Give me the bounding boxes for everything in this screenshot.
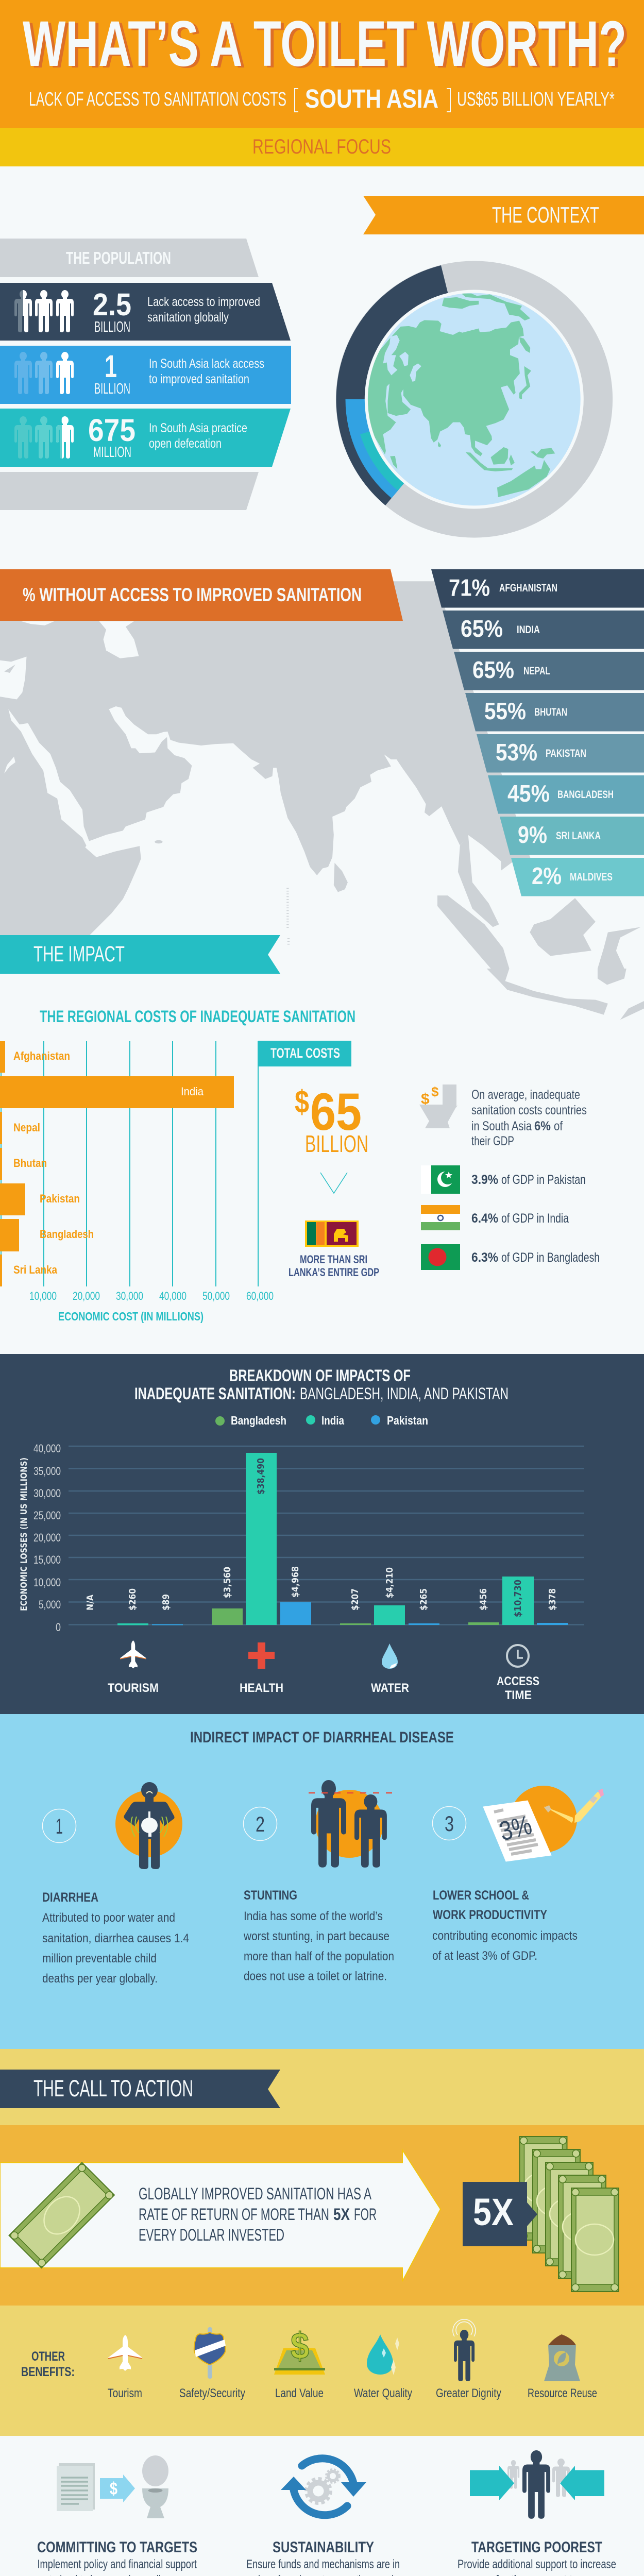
India GDP [471, 1211, 569, 1226]
icon: clock [507, 1645, 529, 1667]
row: Bangladesh: 45% [507, 780, 550, 807]
stat: 1 billion: to improved sanitation [149, 372, 249, 386]
icon: document, money and toilet: $ [110, 2479, 117, 2499]
other benefits heading: BENEFITS: [21, 2365, 75, 2379]
bar value labels: $4,968 [290, 1566, 301, 1598]
donut segment: south asia [345, 399, 474, 498]
icon: safety shield [194, 2327, 226, 2379]
donut ring [336, 261, 613, 538]
breakdown heading: INADEQUATE SANITATION: [134, 1384, 296, 1403]
panel: breakdown of impacts [0, 1354, 644, 1714]
breakdown heading: BANGLADESH, INDIA, AND PAKISTAN [300, 1384, 509, 1403]
GDP text: in South Asia [471, 1119, 532, 1133]
bar value labels: $38,490 [256, 1458, 266, 1495]
category labels: HEALTH [240, 1681, 283, 1695]
icon: toilet with dollars [419, 1084, 457, 1128]
bar chart: regional costs [0, 1041, 274, 1323]
legend: India [321, 1414, 344, 1427]
legend [215, 1414, 428, 1427]
icon: document, money and toilet [57, 2455, 168, 2518]
icon: water drop [382, 1643, 398, 1669]
icon: toilet with dollars: $ [431, 1084, 439, 1099]
heading: regional costs: THE REGIONAL COSTS OF INADEQUATE SANITATION [40, 1007, 355, 1026]
header panel [0, 0, 644, 128]
panel: indirect impact [0, 1714, 644, 2049]
bar value labels: $456 [478, 1588, 489, 1611]
row: Sri Lanka [500, 817, 644, 855]
y axis labels [33, 1442, 61, 1634]
regional focus strip: REGIONAL FOCUS [252, 135, 391, 158]
targeting text [457, 2539, 616, 2576]
bar value labels: $207 [350, 1588, 361, 1611]
benefit labels: Safety/Security [179, 2386, 245, 2400]
bar value labels [85, 1458, 558, 1617]
subtitle: SOUTH ASIA [305, 84, 438, 113]
banner: the call to action [0, 2070, 280, 2108]
Bangladesh GDP: of GDP in Bangladesh [501, 1250, 600, 1265]
total costs tag: TOTAL COSTS [270, 1045, 340, 1061]
Pakistan GDP: 3.9% [471, 1173, 498, 1187]
y axis labels: 35,000 [33, 1465, 61, 1478]
column: sustainability [246, 2459, 400, 2576]
targets text: Implement policy and financial support [37, 2557, 197, 2571]
chart: population donut with globe [336, 261, 613, 538]
stunting text: worst stunting, in part because [243, 1929, 389, 1943]
panel: total costs [258, 1041, 379, 1279]
bar value labels: $4,210 [384, 1567, 395, 1598]
x axis labels: 60,000 [246, 1290, 274, 1302]
targets text [37, 2539, 197, 2576]
GDP text [471, 1088, 587, 1148]
icon: land value: $ [291, 2326, 309, 2367]
bar labels: Sri Lanka [13, 1263, 58, 1276]
row: Bangladesh [488, 775, 644, 814]
$65 billion: $ [295, 1084, 309, 1120]
bar labels: India [181, 1085, 204, 1098]
row: Maldives: MALDIVES [570, 871, 613, 883]
stat: 675 million: open defecation [149, 436, 222, 451]
diarrhea text: DIARRHEA [42, 1890, 98, 1905]
donut segment: global [336, 265, 474, 505]
bar value labels: $378 [547, 1588, 558, 1611]
bar value labels: $3,560 [222, 1567, 233, 1598]
bar labels: Afghanistan [13, 1049, 70, 1062]
bar value labels: $260 [127, 1588, 138, 1611]
row: Afghanistan: 71% [449, 574, 490, 601]
productivity text: LOWER SCHOOL & [433, 1888, 529, 1903]
GDP text: 6% [534, 1119, 551, 1133]
x axis labels: 50,000 [202, 1290, 230, 1302]
icon: health cross [248, 1642, 275, 1669]
category labels: TIME [505, 1688, 532, 1702]
icon: dignity figure [453, 2319, 476, 2381]
panel: country percentages [431, 569, 644, 896]
x axis labels: 40,000 [159, 1290, 187, 1302]
y axis labels: 25,000 [33, 1509, 61, 1522]
row: Maldives: 2% [532, 862, 562, 889]
row: India: 65% [461, 615, 503, 642]
bar labels: Nepal [13, 1121, 40, 1134]
subtitle [29, 84, 615, 113]
Sri Lanka caption [289, 1253, 379, 1279]
Sri Lanka caption: MORE THAN SRI [300, 1253, 367, 1266]
productivity text [432, 1888, 578, 1963]
diarrhea text: sanitation, diarrhea causes 1.4 [42, 1931, 189, 1945]
GDP text: of [554, 1119, 563, 1133]
population heading: THE POPULATION [66, 248, 171, 267]
category labels: TOURISM [108, 1681, 159, 1695]
y axis labels: 40,000 [33, 1442, 61, 1455]
number 2: 2 [256, 1812, 265, 1836]
banner: % without access: % WITHOUT ACCESS TO IMPROVED SANITATION [23, 584, 362, 605]
productivity text: WORK PRODUCTIVITY [433, 1908, 547, 1922]
sustainability text: Ensure funds and mechanisms are in [246, 2557, 400, 2571]
breakdown heading [134, 1366, 509, 1403]
bar value labels: $89 [161, 1594, 172, 1611]
icon: water quality drop [367, 2334, 399, 2375]
x axis labels: 20,000 [73, 1290, 100, 1302]
stunting text: does not use a toilet or latrine. [244, 1969, 387, 1984]
subtitle: LACK OF ACCESS TO SANITATION COSTS [29, 89, 286, 110]
icon: test paper and pencil: 3% [497, 1810, 535, 1847]
column: diarrhea [42, 1782, 189, 1986]
y axis labels: 0 [56, 1621, 61, 1634]
y axis labels: 10,000 [33, 1576, 61, 1589]
$65 billion [295, 1082, 368, 1157]
diarrhea text [42, 1890, 189, 1986]
row: Maldives [511, 858, 644, 896]
icon: figures and arrows [470, 2450, 604, 2519]
benefit labels: Water Quality [354, 2386, 412, 2400]
stunting text: more than half of the population [244, 1950, 394, 1963]
productivity text: contributing economic impacts [432, 1929, 578, 1943]
productivity text: of at least 3% of GDP. [432, 1949, 537, 1963]
breakdown heading: BREAKDOWN OF IMPACTS OF [229, 1366, 411, 1385]
number 1: 1 [56, 1814, 63, 1838]
number 2 [243, 1807, 277, 1840]
row: Nepal [454, 652, 644, 690]
icon: test paper and pencil [483, 1786, 604, 1861]
row: India: INDIA [517, 624, 540, 636]
$65 billion: 65 [310, 1082, 362, 1141]
stunting text: STUNTING [244, 1888, 297, 1903]
row: India [443, 611, 644, 649]
Pakistan GDP: of GDP in Pakistan [501, 1173, 586, 1187]
return text: FOR [354, 2205, 377, 2224]
benefit labels: Greater Dignity [436, 2386, 501, 2400]
row: Bhutan: BHUTAN [534, 706, 567, 718]
icon: land value [274, 2326, 325, 2375]
stat: 2.5 billion: sanitation globally [147, 310, 229, 325]
icon: resource bag [544, 2334, 580, 2381]
GDP text: sanitation costs countries [471, 1103, 587, 1117]
globe land [365, 294, 555, 497]
return band [0, 2125, 644, 2306]
icon: Bangladesh flag [421, 1244, 460, 1270]
row: Afghanistan [431, 569, 644, 608]
return text: 5X [333, 2205, 350, 2224]
row: Pakistan [477, 734, 644, 773]
$65 billion: BILLION [305, 1130, 368, 1157]
bar value labels: $265 [418, 1588, 429, 1611]
legend: Bangladesh [231, 1414, 286, 1427]
number 1 [42, 1809, 76, 1842]
targeting text: TARGETING POOREST [471, 2539, 602, 2556]
bar labels [13, 1049, 204, 1276]
row: Bangladesh: BANGLADESH [557, 789, 614, 801]
GDP text: On average, inadequate [471, 1088, 580, 1102]
diarrhea text: Attributed to poor water and [42, 1911, 175, 1925]
benefit labels: Land Value [275, 2386, 324, 2400]
population heading [0, 239, 259, 277]
stat: 1 billion: 1 [105, 349, 117, 384]
Pakistan GDP [471, 1173, 586, 1187]
bar labels: Bhutan [13, 1157, 47, 1170]
column: stunting [243, 1780, 394, 1984]
targets text: COMMITTING TO TARGETS [37, 2539, 197, 2556]
return text: GLOBALLY IMPROVED SANITATION HAS A [139, 2184, 371, 2203]
y axis labels: 30,000 [33, 1487, 61, 1500]
row: Sri Lanka: 9% [518, 821, 547, 848]
chevron [320, 1173, 347, 1193]
stat: 675 million: In South Asia practice [149, 421, 247, 435]
stat: 675 million: MILLION [93, 444, 131, 461]
row: Nepal: 65% [472, 656, 514, 683]
x axis labels [29, 1290, 274, 1302]
icon: stack of bills [519, 2137, 619, 2292]
arrow [0, 2150, 440, 2281]
banner: the context [363, 196, 644, 234]
stat: 2.5 billion: 2.5 [93, 287, 131, 322]
return text: EVERY DOLLAR INVESTED [139, 2226, 284, 2244]
row: Pakistan: PAKISTAN [546, 748, 586, 759]
population footer band [0, 472, 259, 510]
row: Pakistan: 53% [496, 739, 537, 766]
Bangladesh GDP [471, 1250, 600, 1265]
India GDP: of GDP in India [501, 1211, 569, 1226]
stunting text: India has some of the world’s [244, 1909, 383, 1923]
bar value labels: N/A [85, 1595, 96, 1611]
icon: Sri Lanka flag [305, 1221, 359, 1247]
stat: 2.5 billion: Lack access to improved [147, 295, 260, 309]
icon: person with stomach ache [115, 1782, 182, 1869]
category labels: WATER [371, 1681, 409, 1695]
India GDP: 6.4% [471, 1211, 498, 1226]
row: Bhutan [465, 693, 644, 732]
map: south asia [0, 581, 644, 1020]
number 3: 3 [445, 1811, 454, 1836]
icon: Pakistan flag [421, 1165, 460, 1194]
banner: % without access [0, 569, 403, 621]
x axis labels: 30,000 [116, 1290, 143, 1302]
diarrhea text: million preventable child [42, 1952, 157, 1965]
icon: cycle arrows and gears [281, 2459, 366, 2515]
5X callout [463, 2182, 537, 2246]
indirect heading: INDIRECT IMPACT OF DIARRHEAL DISEASE [190, 1729, 454, 1746]
bar value labels: $10,730 [513, 1580, 523, 1617]
banner: the impact: THE IMPACT [33, 942, 125, 967]
panel: the population [0, 239, 291, 510]
column: committing to targets [37, 2455, 197, 2576]
panel: GDP facts [419, 1084, 600, 1270]
stat: 675 million [0, 409, 291, 467]
stat: 2.5 billion: BILLION [94, 319, 130, 335]
GDP text: their GDP [471, 1134, 514, 1148]
bar labels: Bangladesh [40, 1228, 94, 1241]
5X callout: 5X [473, 2191, 514, 2233]
other benefits heading: OTHER [31, 2349, 65, 2364]
benefit labels [108, 2386, 597, 2400]
benefit labels: Resource Reuse [528, 2386, 597, 2400]
sustainability text: SUSTAINABILITY [273, 2539, 374, 2556]
total costs tag [258, 1041, 351, 1066]
legend: Pakistan [387, 1414, 428, 1427]
category labels [108, 1674, 539, 1702]
benefit labels: Tourism [108, 2386, 142, 2400]
bar labels: Pakistan [40, 1192, 80, 1205]
row: Nepal: NEPAL [523, 665, 550, 677]
icon: plane [120, 1640, 146, 1668]
icon: stunted figures [309, 1780, 392, 1868]
other benefits heading [21, 2349, 75, 2379]
donut segment: open defecation [360, 399, 474, 490]
icon: tilted bill [9, 2163, 114, 2268]
sustainability text [246, 2539, 400, 2576]
bars [83, 1453, 568, 1625]
banner: the call to action: THE CALL TO ACTION [33, 2075, 193, 2102]
stat: 675 million: 675 [88, 413, 135, 448]
Sri Lanka caption: LANKA’S ENTIRE GDP [289, 1266, 379, 1279]
y axis labels: 15,000 [33, 1553, 61, 1566]
panel: call to action [0, 2049, 644, 2436]
y axis labels: 20,000 [33, 1531, 61, 1544]
return text: RATE OF RETURN OF MORE THAN [139, 2205, 329, 2224]
row: Bhutan: 55% [484, 698, 526, 724]
icon: India flag [421, 1205, 460, 1230]
stat: 1 billion: BILLION [94, 381, 130, 397]
stat: 1 billion [0, 346, 291, 404]
row: Afghanistan: AFGHANISTAN [499, 582, 557, 594]
y axis title: ECONOMIC LOSSES (IN US MILLIONS) [19, 1458, 29, 1611]
x axis title: ECONOMIC COST (IN MILLIONS) [58, 1310, 204, 1323]
stat: 1 billion: In South Asia lack access [149, 357, 264, 371]
x axis labels: 10,000 [29, 1290, 57, 1302]
icon: toilet with dollars: $ [421, 1091, 430, 1108]
column: lower productivity [432, 1786, 604, 1963]
regional focus strip [0, 128, 644, 166]
bars [0, 1041, 234, 1286]
category labels: ACCESS [497, 1674, 539, 1688]
column: targeting poorest [457, 2450, 616, 2576]
icon: tourism plane [108, 2335, 142, 2371]
row: Sri Lanka: SRI LANKA [556, 830, 601, 842]
banner: the impact [0, 935, 280, 974]
Bangladesh GDP: 6.3% [471, 1250, 498, 1265]
stunting text [243, 1888, 394, 1984]
return text [139, 2184, 377, 2244]
y axis labels: 5,000 [39, 1598, 61, 1611]
number 3 [433, 1806, 466, 1840]
stat: 2.5 billion [0, 283, 291, 341]
diarrhea text: deaths per year globally. [42, 1972, 158, 1986]
